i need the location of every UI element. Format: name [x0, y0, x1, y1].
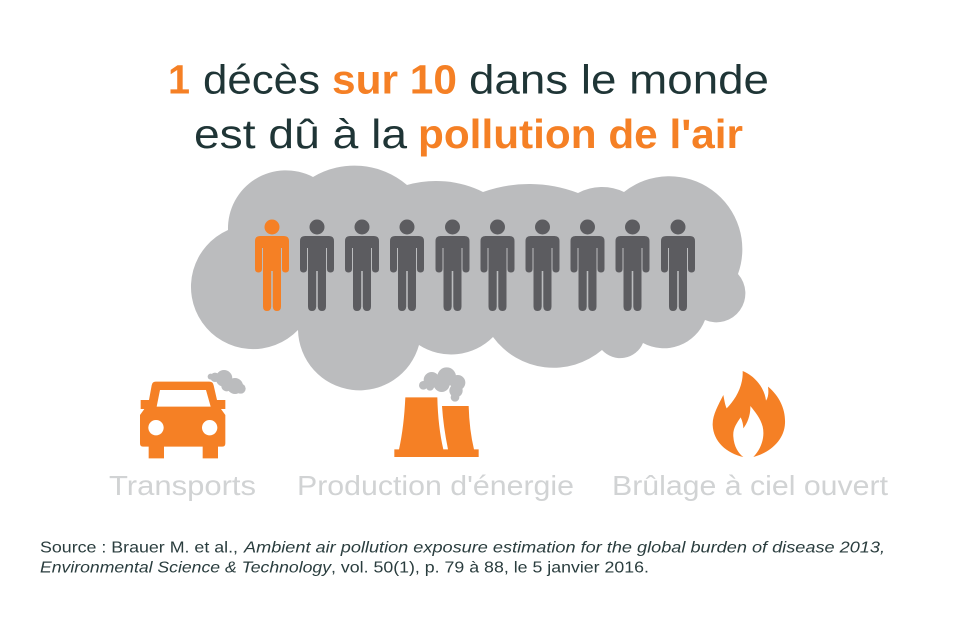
- title line 1: 1: [168, 56, 190, 102]
- icon: car with exhaust: [140, 370, 246, 458]
- row of ten people: [255, 220, 695, 311]
- source citation: Ambient air pollution exposure estimation for the global burden of disease 2013,: [243, 540, 885, 557]
- nine grey people: [300, 220, 695, 311]
- icon: power plant cooling towers: [394, 367, 479, 457]
- title line 2: est dû à la: [194, 111, 407, 157]
- source citation: , vol. 50(1), p. 79 à 88, le 5 janvier 2016.: [331, 560, 649, 577]
- label: Transports: Transports: [109, 470, 256, 501]
- pollution cloud: [191, 166, 745, 390]
- source citation: Environmental Science & Technology: [40, 560, 332, 577]
- title line 2: pollution de l'air: [418, 111, 743, 157]
- title line 1: dans le monde: [469, 56, 769, 102]
- label: Brûlage à ciel ouvert: Brûlage à ciel ouvert: [612, 470, 888, 501]
- title line 1: [168, 56, 769, 102]
- label: Production d'énergie: Production d'énergie: [297, 470, 574, 501]
- title line 1: décès: [203, 56, 320, 102]
- source citation: Source : Brauer M. et al.,: [40, 540, 238, 557]
- title: [168, 56, 769, 157]
- source citation: [40, 540, 885, 577]
- person highlighted in orange: [255, 220, 289, 311]
- title line 2: [194, 111, 743, 157]
- icon: flame: [713, 371, 785, 457]
- title line 1: sur 10: [332, 56, 457, 102]
